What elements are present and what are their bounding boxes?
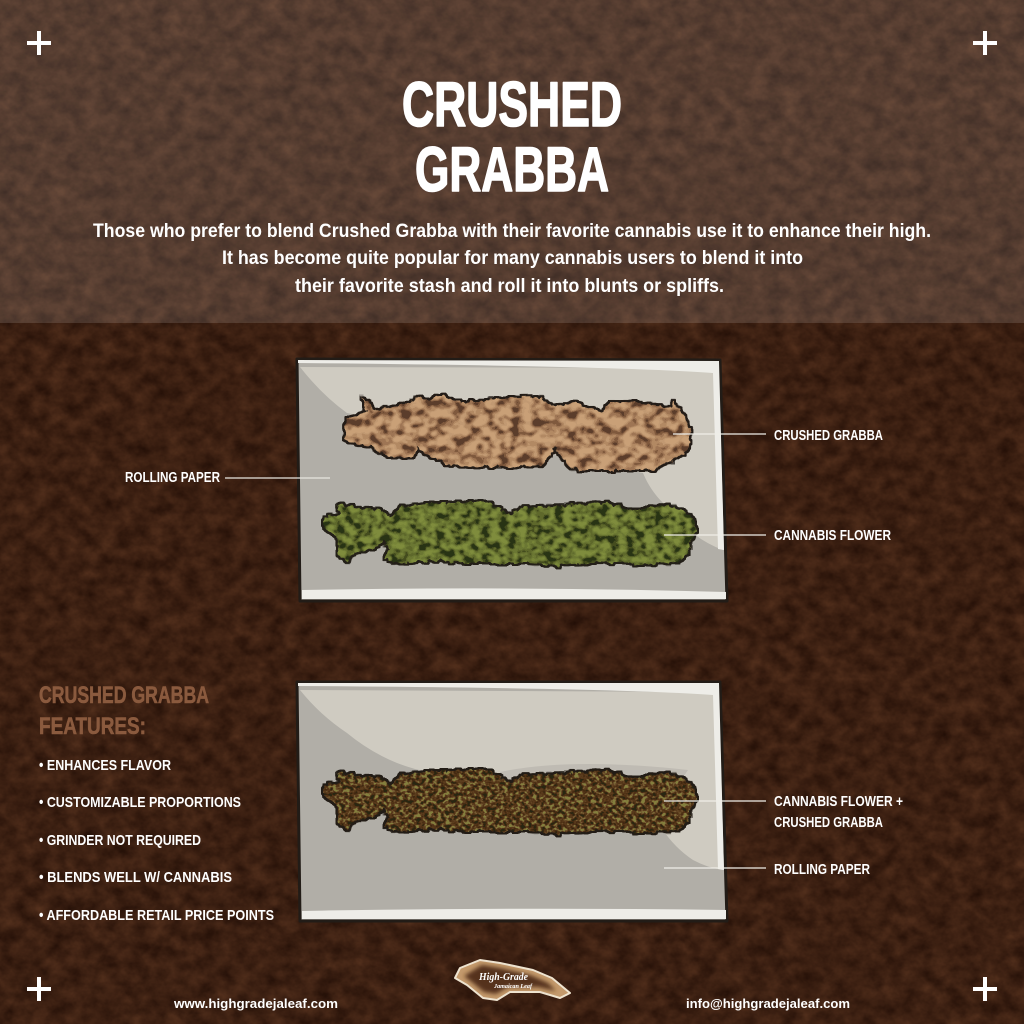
icon: bottom-left plus [27,977,51,1001]
panel: blended rolling paper illustration [297,682,727,921]
footer website: www.highgradejaleaf.com [173,996,338,1011]
features list: • AFFORDABLE RETAIL PRICE POINTS [39,907,274,924]
intro paragraph [93,220,931,297]
features list: • BLENDS WELL W/ CANNABIS [39,869,232,886]
intro paragraph: their favorite stash and roll it into blunts or spliffs. [295,275,724,297]
cannabis flower pile [323,503,695,565]
panel: separate rolling paper illustration [297,359,727,601]
features list: • CUSTOMIZABLE PROPORTIONS [39,794,241,811]
footer email: info@highgradejaleaf.com [686,996,850,1011]
callout: cannabis flower plus crushed grabba: CANNABIS FLOWER + [774,794,903,810]
callout: rolling paper top: ROLLING PAPER [125,470,220,486]
title [402,70,622,205]
header band [0,0,1024,323]
icon: top-right plus [973,31,997,55]
features heading: FEATURES: [39,713,146,740]
features heading: CRUSHED GRABBA [39,682,209,709]
features list: • GRINDER NOT REQUIRED [39,832,201,849]
intro paragraph: It has become quite popular for many cannabis users to blend it into [222,247,803,269]
callout: crushed grabba: CRUSHED GRABBA [774,428,883,444]
callout: cannabis flower: CANNABIS FLOWER [774,528,891,544]
rolling paper sheet [297,682,727,921]
callout: rolling paper bottom: ROLLING PAPER [774,862,870,878]
callout: cannabis flower plus crushed grabba [664,794,903,831]
title: GRABBA [415,135,609,205]
logo [455,960,570,1000]
title: CRUSHED [402,70,622,140]
rolling paper sheet [297,359,727,601]
logo: High-Grade [478,971,528,983]
mixed cannabis and grabba pile [323,771,695,833]
features heading [39,682,209,740]
features list: • ENHANCES FLAVOR [39,757,171,774]
logo: Jamaican Leaf [493,984,533,990]
callout: cannabis flower plus crushed grabba: CRUSHED GRABBA [774,815,883,831]
features list [39,757,274,924]
intro paragraph: Those who prefer to blend Crushed Grabba with their favorite cannabis use it to enhance their high. [93,220,931,242]
crushed grabba pile [345,395,690,470]
icon: top-left plus [27,31,51,55]
icon: bottom-right plus [973,977,997,1001]
